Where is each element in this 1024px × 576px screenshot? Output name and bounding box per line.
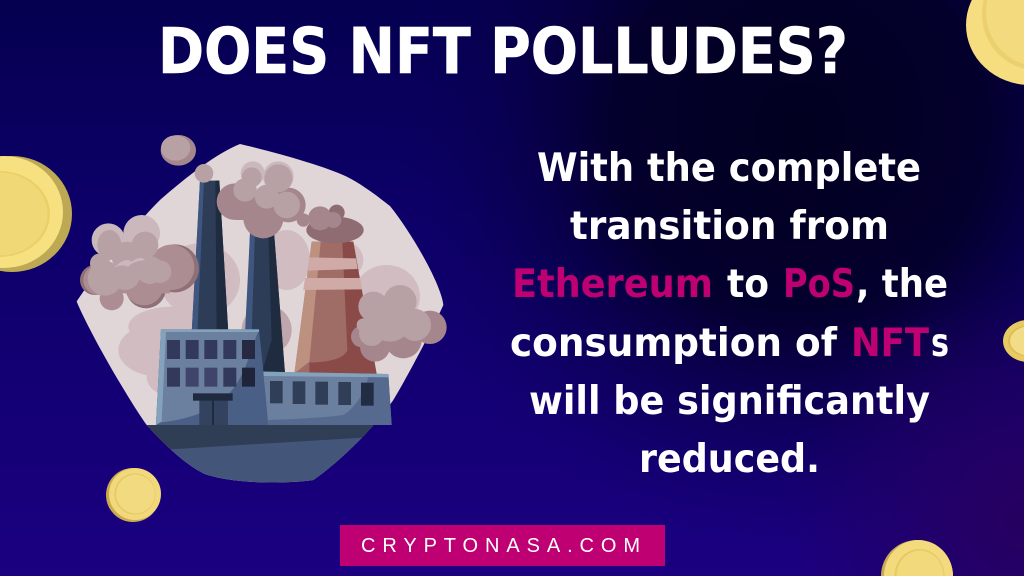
body text: PoS	[783, 262, 855, 307]
smoke: top cloud	[217, 161, 306, 238]
smoke: left cloud	[80, 215, 199, 310]
body text: consumption of	[510, 321, 838, 366]
body text: , the	[856, 262, 948, 307]
side building	[263, 372, 392, 425]
doorway and sign	[199, 400, 228, 425]
chimney middle	[245, 223, 285, 373]
body text: reduced.	[639, 437, 820, 482]
body text	[510, 146, 949, 482]
side windows	[270, 381, 374, 406]
footer badge: CRYPTONASA.COM	[361, 535, 640, 557]
coin: right edge	[1003, 320, 1024, 362]
main building	[156, 329, 269, 425]
footer badge	[340, 525, 665, 566]
body text: s	[931, 321, 949, 366]
smoke: tower cloud	[297, 205, 364, 243]
cooling tower	[294, 242, 377, 374]
title: DOES NFT POLLUDES?	[158, 15, 848, 88]
smoke: small puffs	[161, 135, 213, 183]
background smoke	[118, 230, 420, 397]
body text: Ethereum	[512, 262, 713, 307]
body text: NFT	[851, 321, 929, 366]
smoke: right cloud	[351, 285, 447, 362]
coin: top right	[966, 0, 1024, 85]
body text: to	[727, 262, 769, 307]
windows	[167, 340, 255, 387]
coin: left	[0, 156, 72, 272]
body text: With the complete	[537, 146, 921, 191]
body text: will be significantly	[529, 379, 930, 424]
coin: bottom left	[106, 468, 161, 522]
coin: bottom right	[881, 540, 953, 576]
ground	[146, 425, 374, 482]
illustration: factory	[77, 135, 447, 485]
body text: transition from	[570, 204, 889, 249]
backdrop blob	[77, 144, 443, 482]
chimney left	[192, 181, 228, 333]
